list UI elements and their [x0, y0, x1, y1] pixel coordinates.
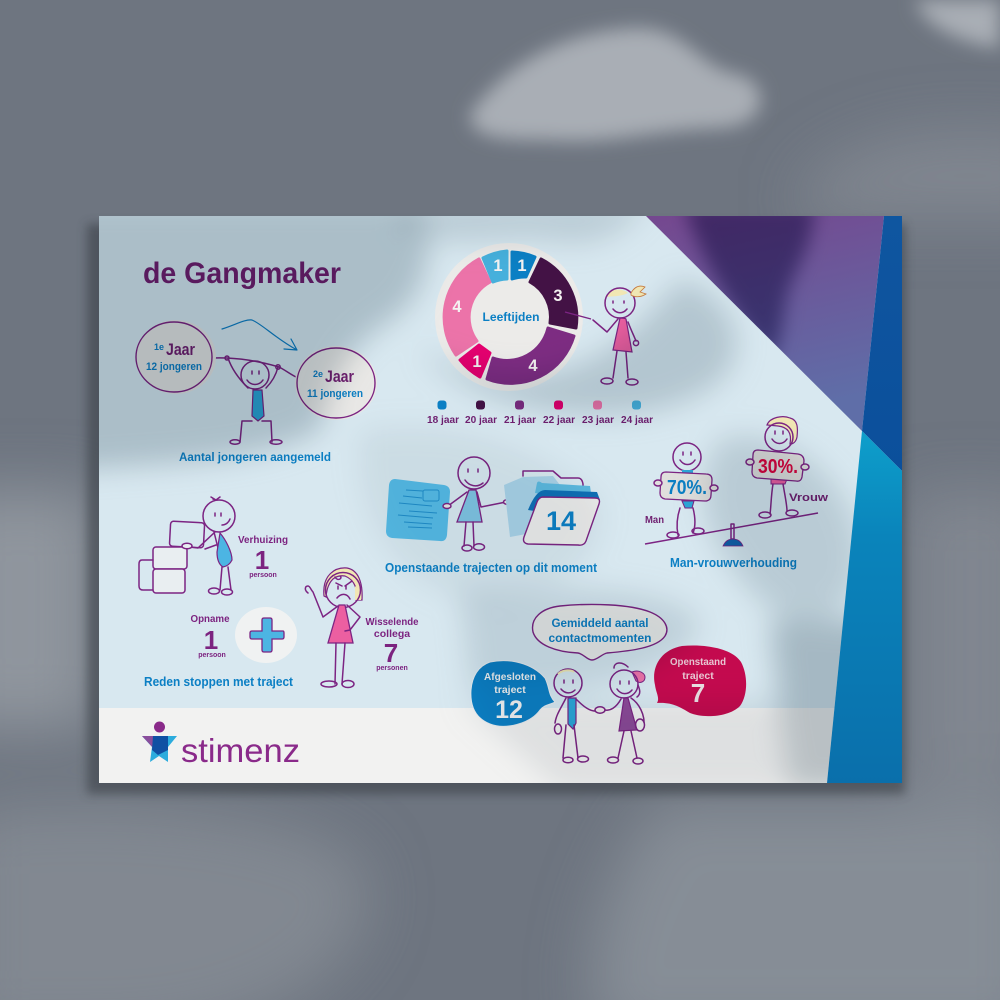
stat: opname	[190, 613, 230, 659]
circle: year 1	[136, 320, 216, 394]
legend: 23 jaar	[582, 414, 614, 426]
icon: stimenz star	[142, 722, 177, 762]
icon: person presenting	[443, 457, 512, 551]
speech bubble: openstaand traject: Openstaand	[670, 656, 726, 668]
donut values: 1	[472, 353, 482, 371]
caption: Aantal jongeren aangemeld	[179, 450, 331, 464]
decorative corner: purple	[646, 216, 884, 431]
donut values	[452, 257, 563, 375]
legend: 20 jaar	[465, 414, 497, 426]
icon: woman with 30 percent sign: 30%.	[758, 456, 798, 478]
circle: year 1: 12 jongeren	[146, 361, 202, 373]
poster background	[99, 216, 902, 783]
icon: seesaw	[645, 513, 818, 546]
speech bubble: afgesloten traject: Afgesloten	[484, 671, 536, 683]
icon: folder with number: 14	[546, 506, 576, 536]
stat: opname: 1	[204, 625, 218, 655]
stat: wisselende collega: collega	[374, 628, 410, 640]
icon: boy shaking hands	[554, 669, 597, 763]
speech bubble: afgesloten traject: 12	[495, 696, 523, 724]
speech bubble: openstaand traject	[654, 646, 746, 716]
speech bubble: heading: Gemiddeld aantal	[552, 616, 648, 630]
panel: gemiddeld aantal contactmomenten	[471, 604, 746, 764]
icon: frustrated woman	[305, 568, 362, 688]
circle: year 2	[295, 346, 377, 420]
icon: girl with pointer	[565, 286, 646, 385]
speech bubble: openstaand traject: traject	[682, 670, 714, 682]
donut values: 3	[553, 287, 563, 305]
legend: 18 jaar	[427, 414, 459, 426]
panel: aantal jongeren aangemeld	[136, 320, 377, 464]
icon: folder with number	[504, 471, 600, 545]
donut values: 4	[452, 298, 462, 316]
legend	[427, 400, 653, 426]
donut values: 1	[493, 257, 503, 275]
stat: verhuizing: 1	[255, 545, 269, 575]
circle: year 1: 1e	[154, 342, 164, 352]
stat: wisselende collega	[366, 616, 419, 672]
icon: man with 70 percent sign: 70%.	[667, 477, 707, 499]
donut backing	[435, 243, 583, 391]
circle: year 2: 11 jongeren	[307, 388, 363, 400]
panel: reden stoppen met traject	[139, 497, 419, 689]
donut segments	[444, 251, 577, 383]
circle: year 2: Jaar	[325, 367, 354, 386]
legend: 21 jaar	[504, 414, 536, 426]
speech bubble: afgesloten traject: traject	[494, 684, 526, 696]
stat: wisselende collega: 7	[384, 638, 398, 668]
circle: year 2: 2e	[313, 369, 323, 379]
speech bubble: heading	[533, 604, 667, 660]
legend: 22 jaar	[543, 414, 575, 426]
icon: man with 70 percent sign	[654, 443, 718, 538]
logo: stimenz	[142, 722, 300, 769]
caption: Openstaande trajecten op dit moment	[385, 561, 598, 575]
legend: 24 jaar	[621, 414, 653, 426]
panel: leeftijden donut chart	[427, 243, 653, 426]
speech bubble: openstaand traject: 7	[691, 678, 705, 708]
panel: openstaande trajecten	[385, 457, 600, 575]
donut values: 4	[528, 357, 538, 375]
speech bubble: afgesloten traject	[471, 661, 555, 726]
title: de Gangmaker	[143, 257, 341, 290]
label: man: Man	[645, 515, 664, 526]
caption: Man-vrouwverhouding	[670, 556, 797, 570]
stat: wisselende collega: Wisselende	[366, 616, 419, 628]
stat: verhuizing: persoon	[249, 572, 277, 579]
wordmark: stimenz	[181, 732, 300, 769]
stat: verhuizing	[238, 534, 288, 579]
icon: girl with cap shaking hands	[605, 663, 645, 764]
poster card shadow	[87, 224, 905, 794]
donut values: 1	[517, 257, 527, 275]
decorative corner: light blue	[827, 431, 902, 783]
caption: Reden stoppen met traject	[144, 675, 294, 689]
decorative corner: dark blue	[862, 216, 902, 471]
speech bubble: heading: contactmomenten	[548, 631, 652, 645]
icon: medical cross	[235, 607, 297, 663]
icon: woman with 30 percent sign	[746, 417, 809, 518]
icon: document	[386, 479, 450, 541]
icon: weightlifter	[213, 356, 296, 444]
donut centre: Leeftijden	[482, 310, 540, 324]
stat: opname: persoon	[198, 652, 226, 659]
panel: man-vrouwverhouding	[645, 417, 829, 570]
icon: man with boxes	[139, 497, 235, 595]
stat: verhuizing: Verhuizing	[238, 534, 288, 546]
arrow: from year 1 to year 2	[222, 320, 297, 350]
stat: wisselende collega: personen	[376, 665, 408, 672]
white footer band	[99, 708, 839, 783]
icon: handshake	[595, 707, 605, 713]
label: vrouw: Vrouw	[789, 492, 829, 504]
light and shadow overlay on poster	[99, 216, 854, 783]
circle: year 1: Jaar	[166, 340, 195, 359]
stat: opname: Opname	[190, 613, 230, 625]
shadow on purple corner	[684, 205, 814, 360]
